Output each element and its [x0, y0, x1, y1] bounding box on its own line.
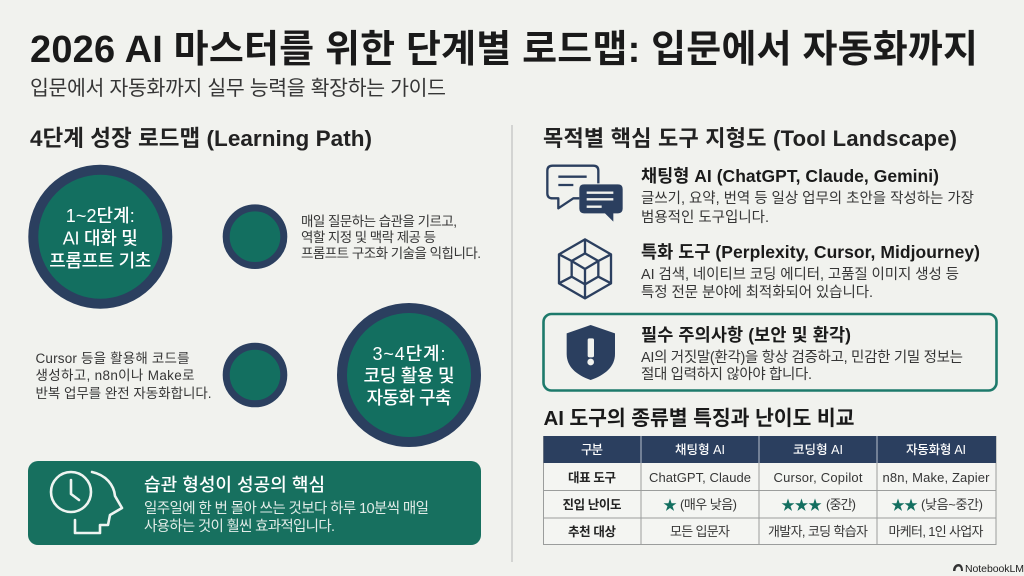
connector dot: upper [226, 208, 284, 266]
text: daily habit: 프롬프트 구조화 기술을 익힙니다. [301, 246, 481, 261]
row: difficulty: (낮음~중간) [921, 497, 983, 512]
row: audience: 모든 입문자 [670, 524, 730, 539]
row: tools: 대표 도구 [568, 471, 616, 485]
callout: security warning: 절대 입력하지 않아야 합니다. [641, 366, 812, 383]
row: difficulty: ★★ [891, 497, 918, 513]
callout: habit [28, 461, 481, 545]
icon: hexagonal cube [559, 239, 611, 298]
table header [581, 442, 966, 457]
circle: steps 1-2: AI 대화 및 [63, 228, 138, 248]
item: specialized tools: 특화 도구 (Perplexity, Cursor, Midjourney) [641, 242, 980, 262]
circle: steps 1-2: 1~2단계: [66, 206, 135, 226]
row: audience [568, 524, 984, 539]
table header: 채팅형 AI [675, 442, 725, 457]
circle: steps 3-4: 3~4단계: [372, 344, 446, 364]
row: tools [568, 470, 990, 485]
title: 2026 AI 마스터를 위한 단계별 로드맵: 입문에서 자동화까지 [30, 29, 978, 71]
panel: learning path [28, 126, 481, 545]
text: daily habit [301, 214, 481, 261]
row: difficulty [562, 497, 983, 513]
text: coding and automation: 반복 업무를 완전 자동화합니다. [36, 386, 212, 401]
text: daily habit: 역할 지정 및 맥락 제공 등 [301, 230, 436, 245]
row: difficulty: ★★★ [781, 497, 822, 513]
icon: chat bubbles [547, 166, 623, 222]
row: audience: 추천 대상 [568, 525, 616, 539]
connector dot: lower [226, 346, 284, 404]
table header: 구분 [581, 443, 603, 457]
text: coding and automation: 생성하고, n8n이나 Make로 [36, 368, 194, 383]
table: comparison [543, 436, 996, 545]
callout: habit: 습관 형성이 성공의 핵심 [144, 475, 325, 495]
table header: 코딩형 AI [793, 442, 843, 457]
row: tools: n8n, Make, Zapier [882, 470, 990, 485]
item: specialized tools [641, 242, 980, 301]
item: chat AI [641, 166, 974, 226]
circle: steps 3-4 [342, 308, 476, 442]
watermark: NotebookLM: NotebookLM [965, 563, 1024, 575]
row: tools: ChatGPT, Claude [649, 470, 751, 485]
item: specialized tools: 특정 전문 분야에 최적화되어 있습니다. [641, 284, 873, 301]
heading: tool landscape: 목적별 핵심 도구 지형도 (Tool Landscape) [543, 126, 957, 151]
item: specialized tools: AI 검색, 네이티브 코딩 에디터, 고품질 이미지 생성 등 [641, 266, 959, 283]
heading: learning path: 4단계 성장 로드맵 (Learning Path) [30, 126, 372, 151]
subtitle: 입문에서 자동화까지 실무 능력을 확장하는 가이드 [30, 77, 446, 100]
icon: clock and head [51, 472, 122, 533]
callout: security warning: AI의 거짓말(환각)을 항상 검증하고, 민감한 기밀 정보는 [641, 349, 963, 366]
row: difficulty: 진입 난이도 [562, 498, 622, 512]
row: difficulty: ★ [663, 497, 677, 513]
item: chat AI: 채팅형 AI (ChatGPT, Claude, Gemini) [641, 166, 939, 186]
text: coding and automation [36, 351, 212, 401]
callout: security warning: 필수 주의사항 (보안 및 환각) [641, 325, 851, 345]
callout: habit: 일주일에 한 번 몰아 쓰는 것보다 하루 10분씩 매일 [144, 500, 429, 517]
row: audience: 마케터, 1인 사업자 [888, 524, 984, 539]
text: daily habit: 매일 질문하는 습관을 기르고, [301, 214, 457, 229]
panel: tool landscape [543, 126, 996, 545]
row: difficulty: (매우 낮음) [680, 497, 737, 512]
callout: security warning [544, 314, 996, 390]
callout: habit: 사용하는 것이 훨씬 효과적입니다. [144, 518, 335, 535]
heading: comparison: AI 도구의 종류별 특징과 난이도 비교 [544, 407, 854, 430]
item: chat AI: 범용적인 도구입니다. [641, 209, 769, 226]
circle: steps 1-2: 프롬프트 기초 [49, 251, 151, 271]
circle: steps 1-2 [33, 170, 167, 304]
table header: 자동화형 AI [906, 442, 966, 457]
row: audience: 개발자, 코딩 학습자 [768, 524, 868, 539]
item: chat AI: 글쓰기, 요약, 번역 등 일상 업무의 초안을 작성하는 가장 [641, 190, 974, 207]
row: difficulty: (중간) [826, 497, 856, 512]
circle: steps 3-4: 코딩 활용 및 [364, 366, 454, 386]
circle: steps 3-4: 자동화 구축 [366, 388, 452, 408]
icon: shield [567, 325, 615, 380]
text: coding and automation: Cursor 등을 활용해 코드를 [36, 351, 190, 366]
row: tools: Cursor, Copilot [774, 470, 863, 485]
